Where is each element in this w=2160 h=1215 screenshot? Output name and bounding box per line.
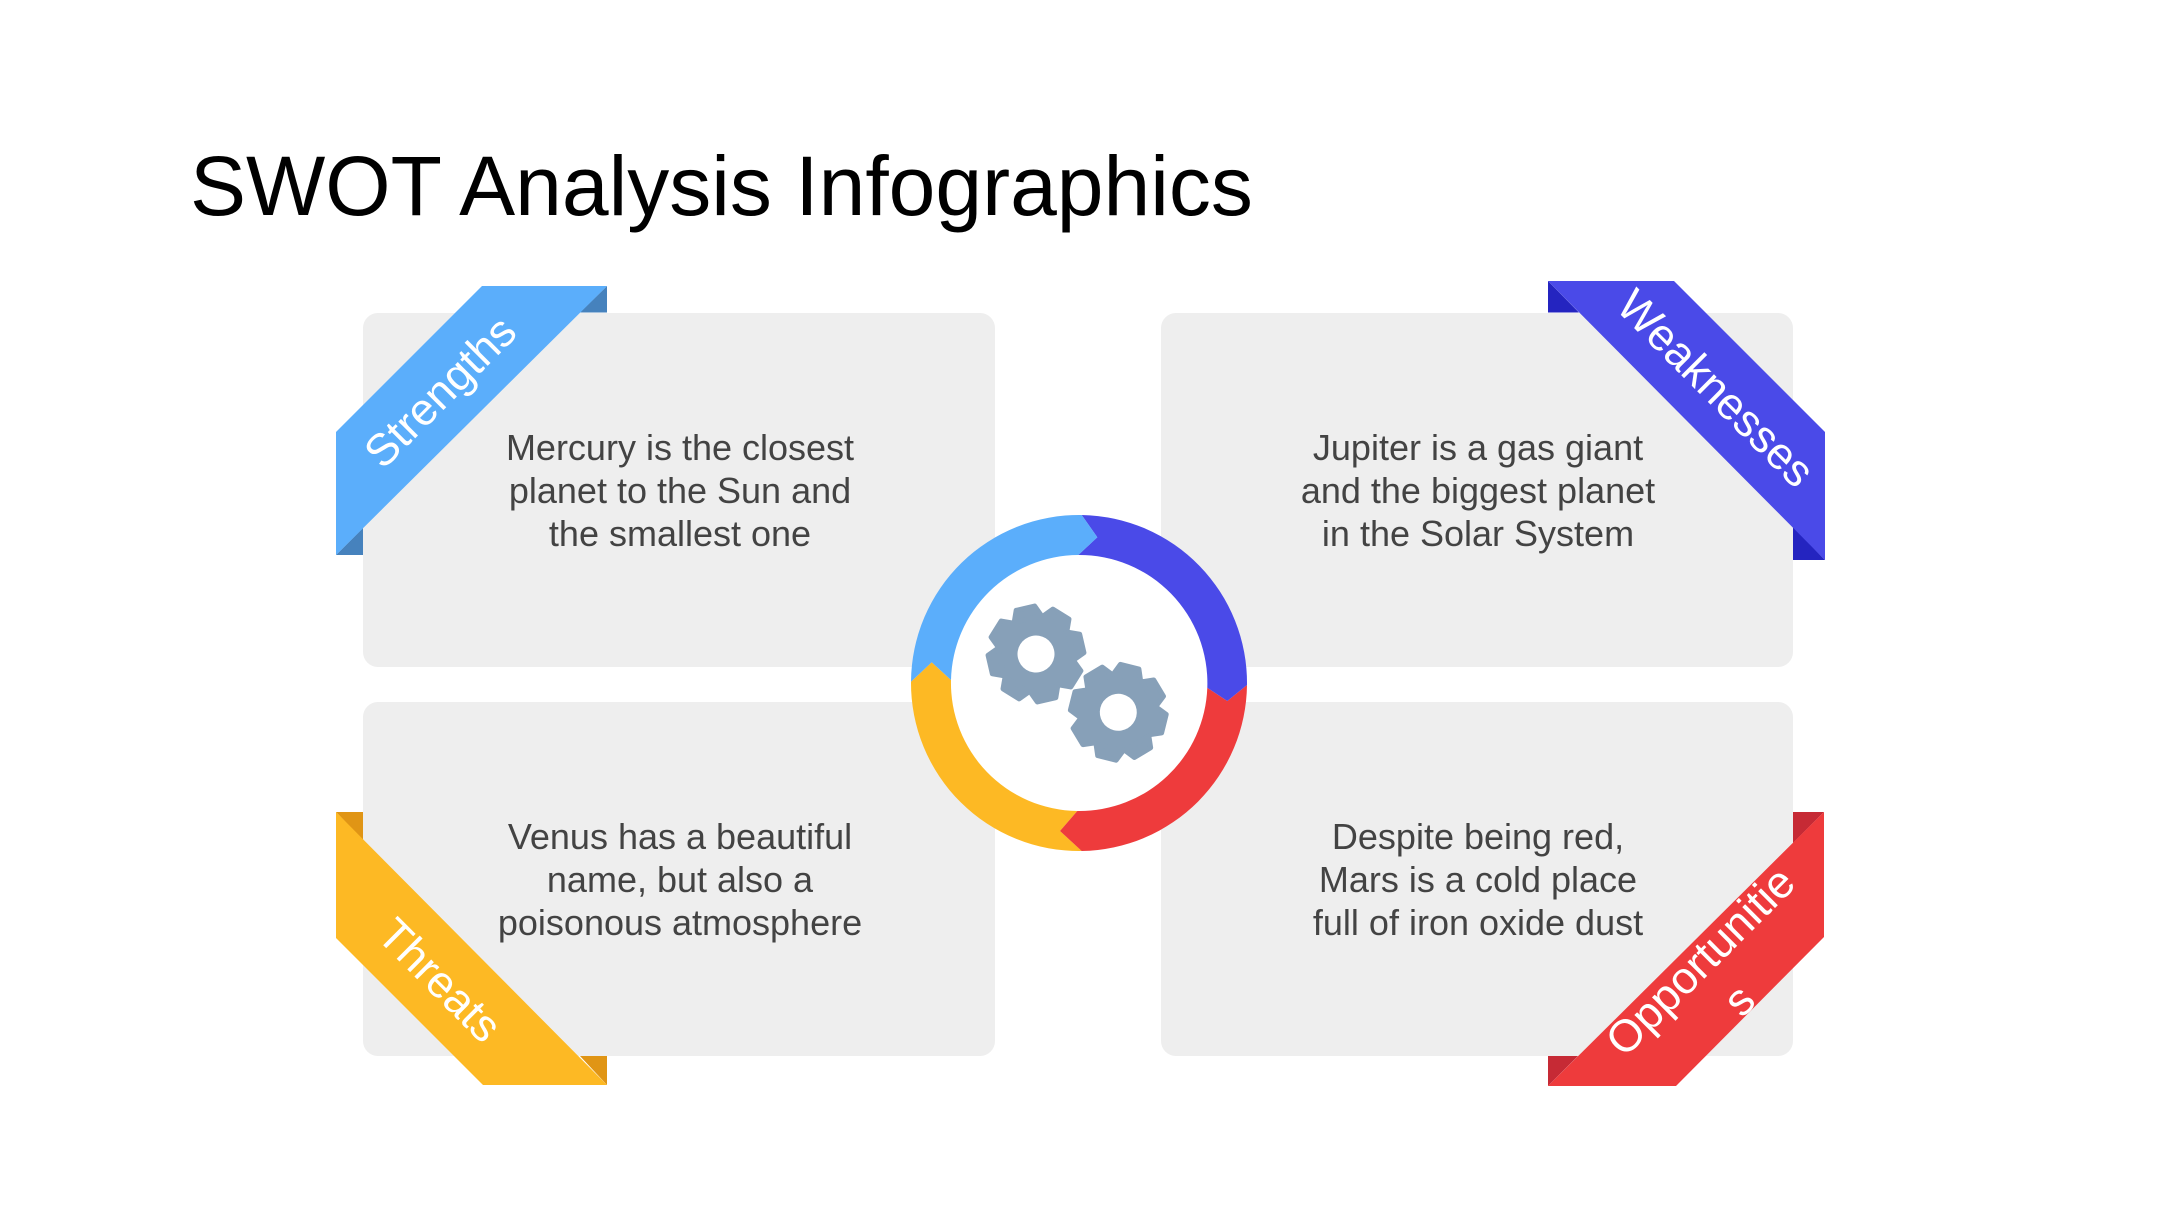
- ring segment: strengths: [911, 515, 1097, 682]
- ribbon: opportunities: [1548, 812, 1844, 1105]
- weaknesses description: Jupiter is a gas giant: [1313, 427, 1643, 468]
- ribbon: strengths: [336, 286, 607, 555]
- panel: threats: [363, 702, 995, 1056]
- opportunities description: Mars is a cold place: [1319, 859, 1637, 900]
- ring segment: threats: [911, 662, 1082, 851]
- panel: weaknesses: [1161, 313, 1793, 667]
- threats description: Venus has a beautiful: [508, 816, 852, 857]
- threats card: [363, 702, 995, 1056]
- weaknesses description: in the Solar System: [1322, 513, 1634, 554]
- central ring: [911, 515, 1247, 851]
- weaknesses card: [1161, 313, 1793, 667]
- ring segment: opportunities: [1060, 685, 1247, 851]
- strengths description: the smallest one: [549, 513, 811, 554]
- gear lower right: [1061, 655, 1175, 769]
- opportunities label: Opportunitie: [1595, 856, 1805, 1066]
- opportunities description: Despite being red,: [1332, 816, 1624, 857]
- panel: strengths: [363, 313, 995, 667]
- weaknesses label: Weaknesses: [1607, 279, 1825, 497]
- title: SWOT Analysis Infographics: [190, 139, 1253, 233]
- strengths description: Mercury is the closest: [506, 427, 854, 468]
- ring centre disc: [949, 553, 1209, 813]
- threats label: Threats: [368, 908, 512, 1052]
- icon: gears: [980, 598, 1175, 769]
- strengths description: planet to the Sun and: [509, 470, 851, 511]
- opportunities label: s: [1713, 974, 1765, 1026]
- threats description: name, but also a: [547, 859, 814, 900]
- threats description: poisonous atmosphere: [498, 902, 862, 943]
- ribbon: weaknesses: [1548, 279, 1825, 560]
- opportunities description: full of iron oxide dust: [1313, 902, 1643, 943]
- gear upper left: [980, 598, 1092, 710]
- strengths card: [363, 313, 995, 667]
- opportunities card: [1161, 702, 1793, 1056]
- panel: opportunities: [1161, 702, 1793, 1056]
- ring segment: weaknesses: [1078, 515, 1247, 701]
- ribbon: threats: [336, 812, 607, 1085]
- strengths label: Strengths: [354, 305, 526, 478]
- weaknesses description: and the biggest planet: [1301, 470, 1655, 511]
